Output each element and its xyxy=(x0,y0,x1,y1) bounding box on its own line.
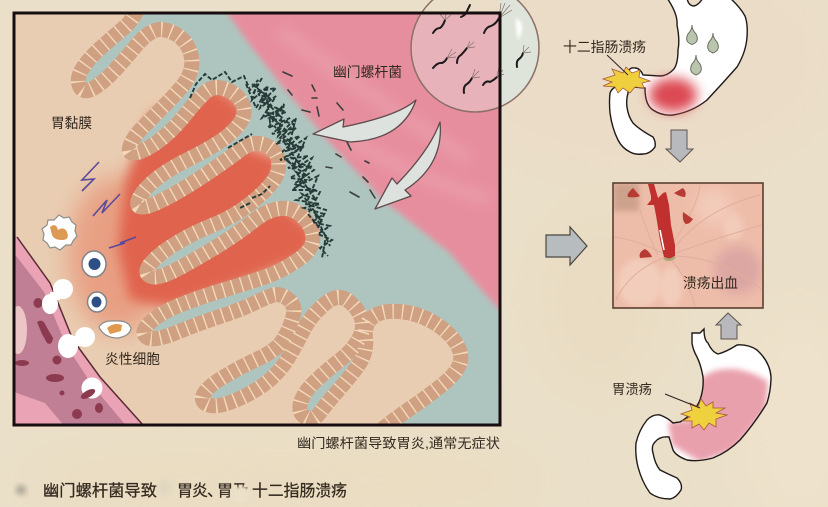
bleeding vessel xyxy=(647,184,675,259)
title: bottom heading: 幽门螺杆菌导致 xyxy=(43,482,157,500)
panel: bleeding ulcer xyxy=(613,183,763,308)
ulcer burst xyxy=(603,67,650,93)
magnifier fill inside frame xyxy=(412,14,498,112)
gastric acid drops xyxy=(687,25,718,75)
bacteria bodies xyxy=(433,5,523,93)
arrow: bacteria moving to mucosa (lower) xyxy=(375,122,440,209)
bacteria flagella xyxy=(440,3,531,78)
stomach with gastric ulcer xyxy=(612,329,771,499)
inflammatory cell: granulocyte xyxy=(42,215,77,250)
inflammation glow xyxy=(68,85,315,333)
title: bottom heading xyxy=(16,480,347,504)
label: ulcer bleeding: 溃疡出血 xyxy=(683,275,738,291)
stomach with duodenal ulcer xyxy=(563,0,747,154)
leader line xyxy=(607,55,628,75)
epithelium cell ticks xyxy=(78,10,461,435)
epithelium band xyxy=(78,10,461,435)
inflamed red area xyxy=(649,78,697,112)
inflammatory cell: small lymphocyte xyxy=(88,292,106,312)
arrow: bacteria moving to mucosa (upper) xyxy=(313,100,416,142)
arrow: up to bleeding ulcer xyxy=(716,313,741,339)
label: inflammatory cells: 炎性细胞 xyxy=(105,351,160,367)
magnifier circle with bacteria xyxy=(411,0,540,112)
inflammatory cell: lymphocyte xyxy=(82,251,106,277)
inflamed pink area xyxy=(668,369,768,462)
label: gastric mucosa: 胃黏膜 xyxy=(51,115,92,131)
stomach outline xyxy=(636,329,771,499)
stomach cavity pink region xyxy=(225,10,505,316)
mucosa tissue xyxy=(10,10,461,440)
label: duodenal ulcer: 十二指肠溃疡 xyxy=(563,39,646,55)
inflammatory cell: macrophage xyxy=(99,321,131,338)
title: bottom heading: 胃炎、胃及 xyxy=(177,483,249,500)
label: gastric ulcer: 胃溃疡 xyxy=(612,382,652,397)
blood vessel xyxy=(16,236,143,424)
lightning: nerve signals xyxy=(82,162,136,248)
arrow: right to bleeding ulcer xyxy=(546,227,587,265)
blood drops xyxy=(628,188,693,258)
white blood cells crossing xyxy=(42,279,102,398)
title: bottom heading: 十二指肠溃疡 xyxy=(252,482,347,500)
mucosal folds xyxy=(613,183,762,308)
label: helicobacter pylori: 幽门螺杆菌 xyxy=(333,64,402,80)
arrow: down to bleeding ulcer xyxy=(666,130,693,162)
stomach outline xyxy=(610,0,747,154)
bacteria cluster on the mucosa xyxy=(190,72,332,258)
panel: stomach wall cross-section xyxy=(16,14,498,424)
leader line xyxy=(665,394,700,408)
scattered bacteria xyxy=(283,72,375,198)
gastric lumen mucus layer xyxy=(86,14,498,424)
caption under panel: 幽门螺杆菌导致胃炎,通常无症状 xyxy=(297,436,501,451)
ulcer burst xyxy=(681,399,727,430)
red blood cells xyxy=(15,298,103,419)
panel frame xyxy=(14,13,500,425)
pink streaks xyxy=(280,30,490,200)
